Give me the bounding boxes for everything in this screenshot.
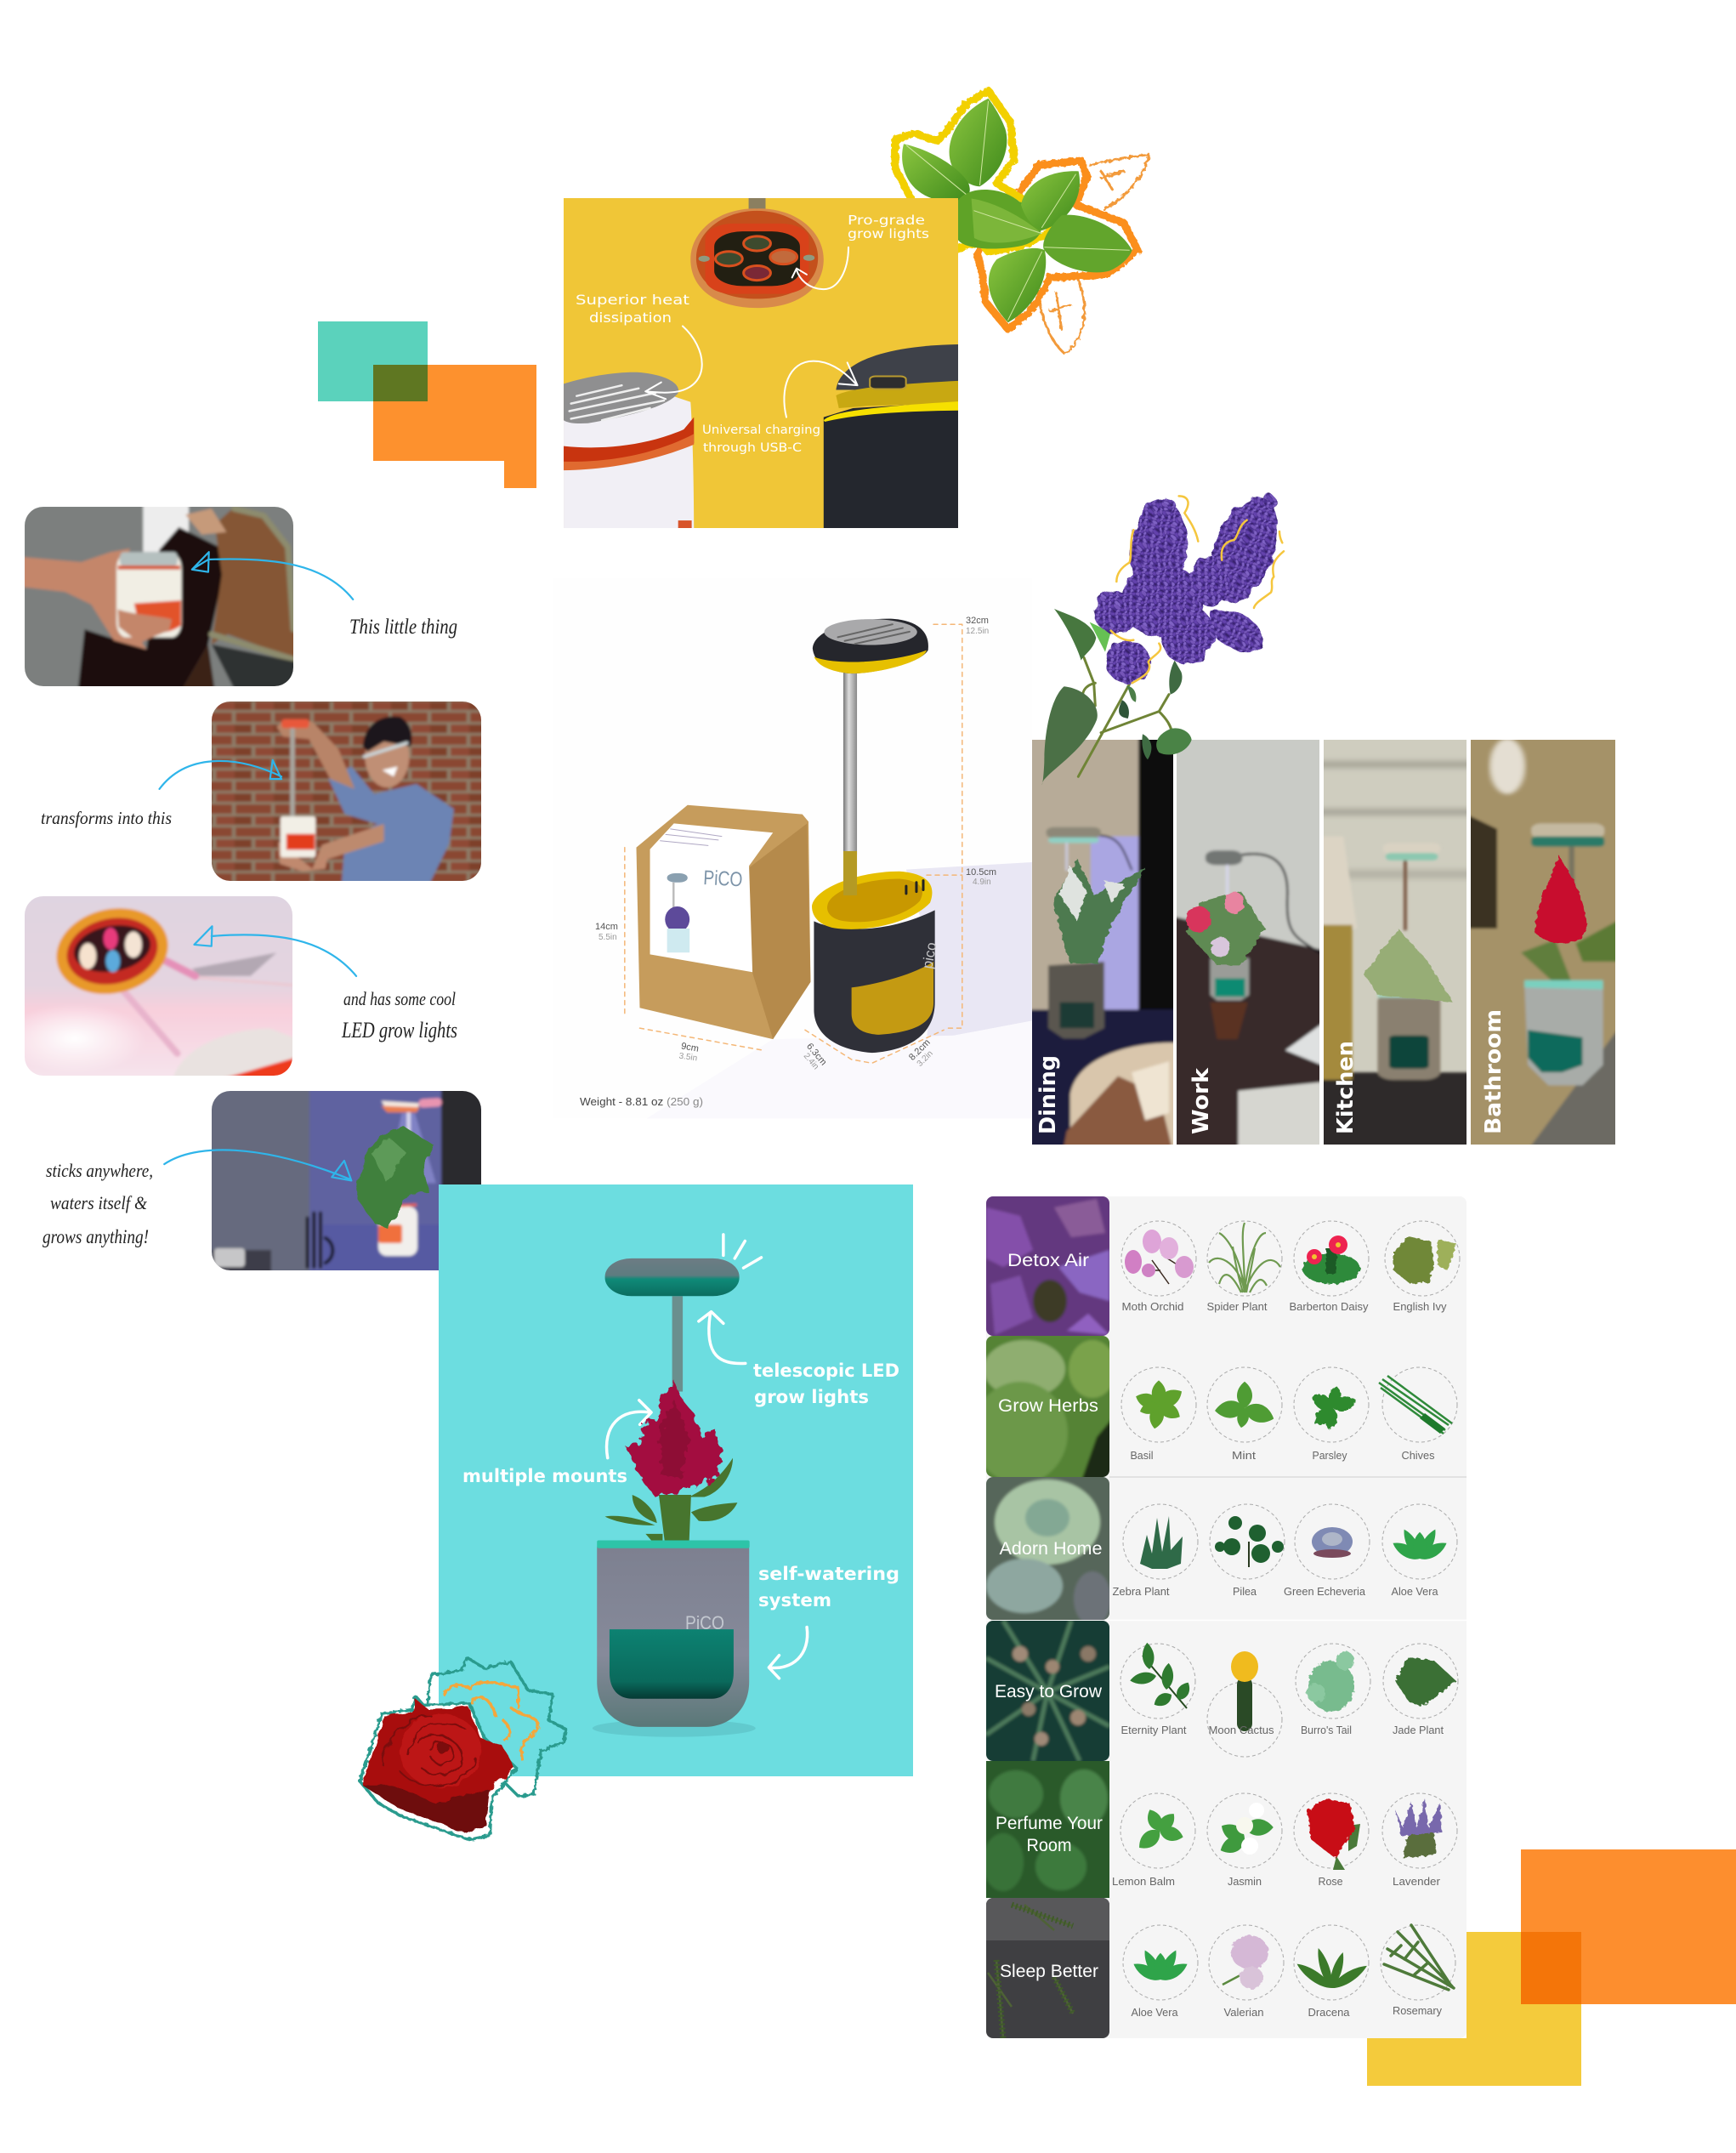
label: work: Work	[1189, 1067, 1214, 1134]
black unit with USB-C port	[824, 344, 958, 528]
category labels: Sleep Better	[1000, 1962, 1098, 1981]
category labels: Easy to Grow	[995, 1682, 1103, 1701]
text: sticks anywhere, waters itself, grows anything	[43, 1160, 153, 1247]
plant name labels: Aloe Vera	[1131, 2006, 1178, 2019]
plant: eternity plant	[1120, 1642, 1195, 1718]
category image: adorn home	[978, 1468, 1118, 1628]
plant: valerian	[1209, 1925, 1284, 2000]
text: transforms into this: transforms into this	[41, 808, 172, 828]
plant name labels: Rose	[1318, 1875, 1343, 1888]
box logo: PiCO	[703, 866, 743, 891]
plant name labels: Chives	[1401, 1449, 1435, 1462]
plant leaves on wall	[356, 1126, 434, 1228]
plant name labels: Green Echeveria	[1284, 1585, 1366, 1598]
lilac flower branch	[1042, 488, 1291, 785]
lamp pole	[843, 667, 857, 855]
room photo: work	[1177, 740, 1319, 1145]
plant: aloe vera	[1382, 1504, 1457, 1579]
plant name labels: Jasmin	[1228, 1875, 1262, 1888]
photo: device in a bag	[23, 504, 296, 690]
plant: zebra plant	[1123, 1504, 1198, 1579]
plant: aloe vera (sleep)	[1123, 1925, 1198, 2000]
text: and has some cool LED grow lights: LED grow lights	[341, 1018, 457, 1042]
plant name labels: Valerian	[1224, 2006, 1263, 2019]
category image: sleep better	[986, 1898, 1109, 2038]
plant name labels	[1112, 1300, 1447, 2019]
category image: perfume your room	[978, 1753, 1118, 1906]
label: dining: Dining	[1035, 1055, 1061, 1134]
photo: plant stuck on the wall	[212, 1091, 481, 1270]
plant: pilea	[1210, 1504, 1285, 1579]
plant: spider plant	[1207, 1221, 1282, 1296]
plant leaves	[605, 1458, 737, 1541]
dimension labels: 12.5in	[966, 627, 989, 636]
plant: moon cactus	[1207, 1651, 1282, 1757]
label: telescopic LED grow lights: telescopic LED	[753, 1361, 899, 1381]
dining plant	[1053, 859, 1145, 963]
plant name labels: Dracena	[1308, 2006, 1350, 2019]
category labels: Room	[1027, 1836, 1071, 1855]
plant: barberton daisy	[1294, 1221, 1369, 1296]
plant name labels: Spider Plant	[1207, 1300, 1268, 1313]
dimension labels: 8.2cm	[907, 1037, 933, 1063]
category labels: Perfume Your	[996, 1814, 1103, 1833]
room photo: kitchen	[1324, 740, 1467, 1145]
label: pro-grade grow lights: grow lights	[848, 226, 929, 241]
category labels: Detox Air	[1007, 1251, 1089, 1270]
panel: product dimensions photo	[553, 578, 1032, 1118]
label: superior heat dissipation: dissipation	[589, 310, 672, 326]
dimension labels: 32cm	[966, 616, 989, 626]
dashed dimension lines	[625, 624, 962, 1063]
plant name labels: Eternity Plant	[1120, 1724, 1187, 1736]
lilac accent squiggles	[1111, 496, 1284, 683]
label: kitchen: Kitchen	[1333, 1041, 1359, 1134]
text: sticks anywhere, waters itself, grows anything: grows anything!	[43, 1226, 149, 1247]
plant name labels: Mint	[1232, 1449, 1256, 1462]
photo: LED grow lights	[25, 896, 292, 1076]
dimension labels: 6.3cm	[804, 1042, 829, 1067]
lamp head with LEDs	[690, 198, 824, 308]
plant name labels: Lemon Balm	[1112, 1875, 1175, 1888]
plant: lavender	[1382, 1793, 1457, 1868]
plant name labels: English Ivy	[1393, 1300, 1447, 1313]
label: universal charging: Universal charging	[702, 423, 820, 437]
work flowers	[1186, 892, 1265, 965]
label: superior heat dissipation	[576, 292, 689, 326]
dimension labels: 9cm	[680, 1041, 700, 1054]
plant: chives	[1379, 1367, 1457, 1442]
arrow: heat dissipation	[645, 327, 702, 399]
label: self-watering system: system	[758, 1590, 831, 1610]
bathroom plume	[1535, 855, 1586, 943]
plant name labels: Lavender	[1393, 1875, 1441, 1888]
pot logo: PiCO	[685, 1612, 724, 1633]
arrow: to bag photo	[192, 552, 353, 599]
plant name labels: Burro's Tail	[1301, 1724, 1352, 1736]
lamp head	[813, 619, 928, 673]
label: bathroom: Bathroom	[1481, 1009, 1506, 1134]
kitchen plant	[1364, 929, 1453, 1003]
label: superior heat dissipation: Superior heat	[576, 292, 689, 308]
category image: grow herbs	[973, 1327, 1118, 1486]
plant name labels: Basil	[1131, 1449, 1154, 1462]
body logo: pico	[919, 941, 939, 970]
plant name labels: Jade Plant	[1393, 1724, 1444, 1736]
text: and has some cool LED grow lights: and has some cool	[343, 988, 456, 1009]
arrow: grow lights	[792, 247, 848, 289]
arrow: to LED lamp	[194, 926, 356, 976]
plant name labels: Aloe Vera	[1391, 1585, 1438, 1598]
room photo: bathroom	[1471, 740, 1615, 1145]
label: telescopic LED grow lights: grow lights	[754, 1387, 869, 1407]
plant: english ivy	[1385, 1221, 1460, 1296]
dimension labels: 3.2in	[916, 1049, 935, 1069]
label: self-watering system	[758, 1564, 899, 1610]
plant name labels: Barberton Daisy	[1289, 1300, 1369, 1313]
lamp head	[605, 1258, 740, 1296]
plant: basil	[1121, 1367, 1196, 1442]
pot	[597, 1541, 750, 1727]
label: multiple mounts: multiple mounts	[462, 1466, 627, 1486]
text: and has some cool LED grow lights	[341, 988, 457, 1042]
label: pro-grade grow lights	[848, 213, 929, 241]
plant name labels: Rosemary	[1393, 2004, 1442, 2017]
plant: dracena	[1294, 1925, 1370, 2000]
plant: lemon balm	[1120, 1793, 1195, 1868]
plant: rose	[1294, 1793, 1369, 1870]
arrow: to telescoping lamp	[160, 760, 281, 789]
white can with vented top	[564, 372, 694, 528]
category labels	[995, 1251, 1103, 1981]
text: this little thing: This little thing	[349, 616, 457, 639]
dimension labels: 14cm	[595, 922, 618, 932]
pot shadow	[593, 1719, 756, 1737]
plant: parsley	[1294, 1367, 1369, 1442]
label: telescopic LED grow lights	[753, 1361, 899, 1407]
floor shadow	[906, 862, 1032, 1039]
plant: burro's tail	[1296, 1644, 1370, 1718]
dimension labels: 10.5cm	[966, 867, 996, 878]
plant name labels: Pilea	[1233, 1585, 1257, 1598]
plant: jade plant	[1383, 1644, 1458, 1718]
decorative squares: yellow and orange	[1367, 1849, 1736, 2086]
dimension labels: 3.5in	[678, 1052, 698, 1063]
label: universal charging	[702, 423, 820, 455]
weight text: Weight - 8.81 oz (250 g)	[580, 1095, 703, 1108]
decorative squares: teal and orange	[318, 321, 536, 488]
plant name labels: Moon Cactus	[1209, 1724, 1274, 1736]
crimson flower	[627, 1380, 723, 1497]
white pot on wall	[378, 1205, 417, 1256]
arrow: charging	[784, 361, 858, 418]
plant: moth orchid	[1121, 1221, 1196, 1296]
category labels: Grow Herbs	[998, 1396, 1098, 1416]
room photo: dining	[1032, 740, 1173, 1145]
plant: green echeveria	[1295, 1504, 1370, 1579]
label: pro-grade grow lights: Pro-grade	[848, 213, 925, 228]
pot body	[812, 851, 935, 1053]
label: self-watering system: self-watering	[758, 1564, 899, 1584]
plant name labels: Moth Orchid	[1122, 1300, 1183, 1313]
shirt	[329, 766, 454, 883]
red rose with outlines	[360, 1657, 566, 1840]
category image: detox air	[978, 1188, 1118, 1344]
arrow: to plant on wall	[164, 1150, 351, 1180]
text: sticks anywhere, waters itself, grows anything: waters itself &	[50, 1192, 148, 1213]
dimension labels: 4.9in	[973, 878, 991, 887]
dimension labels: 2.4in	[802, 1052, 820, 1071]
basil leaves with sketched outlines	[895, 91, 1149, 354]
plant: jasmin	[1207, 1793, 1282, 1868]
dimension labels: 5.5in	[599, 933, 617, 942]
text: sticks anywhere, waters itself, grows anything: sticks anywhere,	[46, 1160, 153, 1181]
category image: easy to grow	[978, 1612, 1118, 1770]
panel: plant picker table	[973, 1188, 1467, 2038]
panel: cyan product feature card	[439, 1184, 913, 1776]
plant name labels: Zebra Plant	[1112, 1585, 1170, 1598]
cardboard box	[636, 805, 810, 1039]
plant name labels: Parsley	[1313, 1449, 1347, 1462]
label: universal charging: through USB-C	[703, 441, 802, 455]
photo: person extending the lamp	[212, 702, 481, 881]
dimension labels	[595, 616, 996, 1071]
category labels: Adorn Home	[1000, 1539, 1102, 1559]
panel: yellow feature close-ups	[564, 198, 958, 528]
lilac blossoms	[1094, 488, 1291, 683]
plant: mint	[1207, 1367, 1282, 1442]
arrows	[607, 1235, 808, 1679]
pole	[672, 1296, 683, 1392]
plant: rosemary	[1381, 1925, 1455, 2000]
